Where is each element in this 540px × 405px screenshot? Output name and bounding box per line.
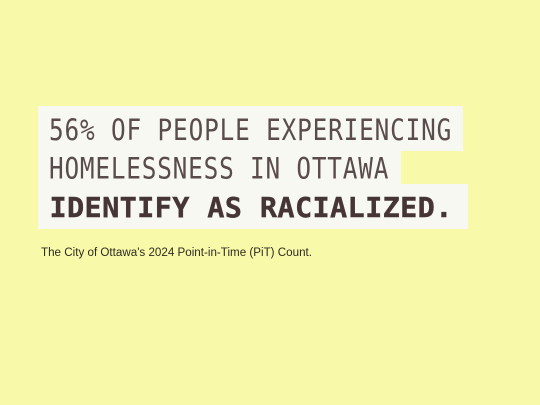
- highlight box: line 2: [38, 150, 401, 185]
- highlight box: line 3: [38, 184, 468, 229]
- headline line 3, bold: IDENTIFY AS RACIALIZED.: [50, 191, 452, 224]
- headline line 1: 56% OF PEOPLE EXPERIENCING: [49, 114, 451, 148]
- headline block: [38, 106, 468, 229]
- headline line 2: HOMELESSNESS IN OTTAWA: [49, 153, 388, 186]
- source caption: The City of Ottawa's 2024 Point-in-Time (PiT) Count.: [41, 247, 312, 259]
- highlight box: line 1: [38, 106, 463, 151]
